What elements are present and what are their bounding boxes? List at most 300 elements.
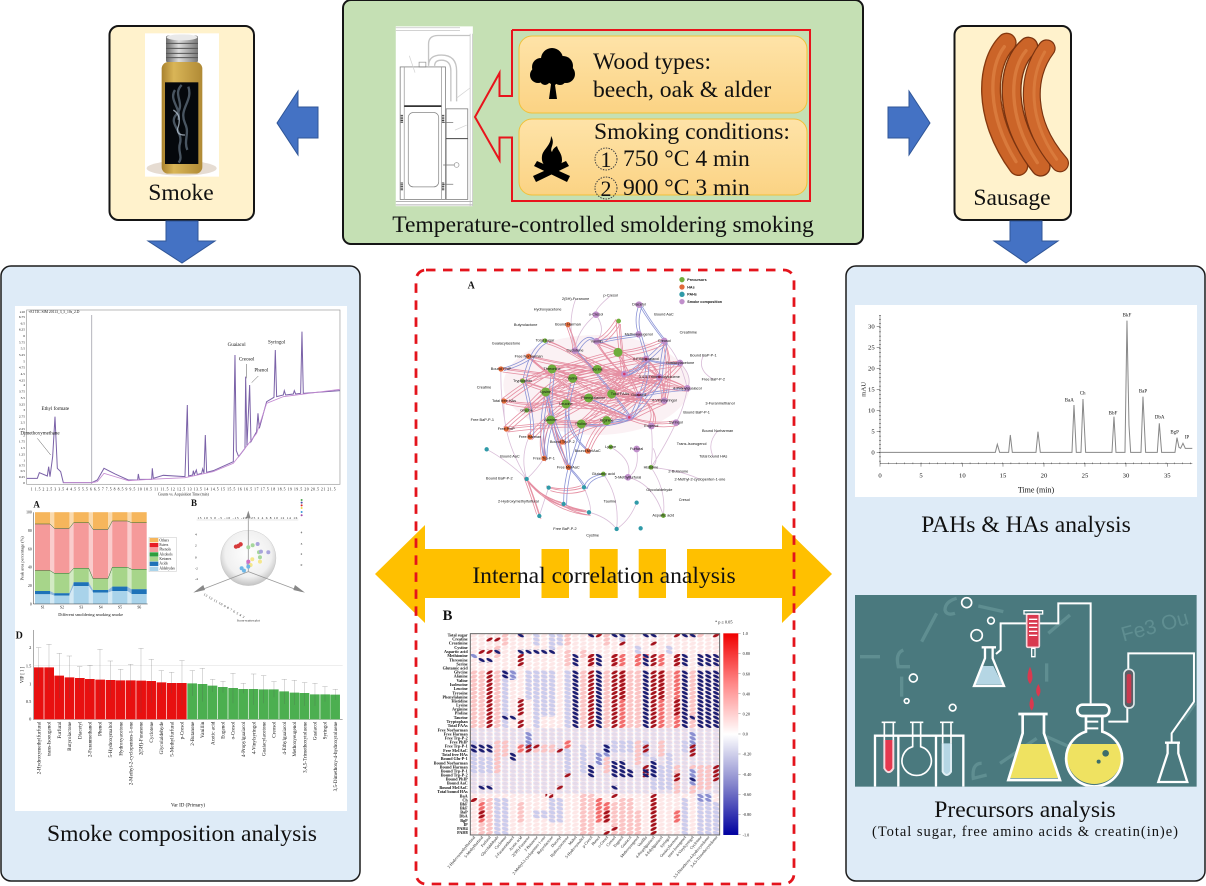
network labels: Cresol [679,498,690,502]
network labels: Free BaP-P-2 [702,377,725,381]
heatmap colour scale: -0.60 [743,792,751,797]
chart: chromatogram: Dimethoxymethane [20,431,60,436]
heatmap row labels: Glutamic acid [443,665,468,670]
chart B: correlation heatmap: B [443,608,453,624]
heatmap column labels: Eugenol [612,834,625,848]
chart A: stacked composition bars: Different smoldering smoking smoke [58,612,123,617]
heatmap row labels: Leucine [454,686,468,691]
chart D: VIP bars: trans-Isoeugenol [47,721,53,756]
chart B: 3D PCA: -2 [195,566,198,570]
network labels: Lysine [540,390,551,394]
network labels: Glycolaldehyde [646,488,672,492]
chart: PAHs chromatogram: 15 [1000,472,1007,479]
arrow: sausage down [994,221,1058,263]
caption: precursors: (Total sugar, free amino acids & creatin(in)e) [872,824,1178,840]
heatmap column labels: Phenol [590,834,602,846]
heatmap row labels: BaA [460,793,468,798]
chart: PAHs chromatogram: mAU [860,382,867,397]
network labels: Bound BaP-P-2 [486,476,513,480]
heatmap column labels: Syringol [659,834,672,848]
heatmap row labels: Valine [456,678,468,683]
heatmap row labels: BgP [460,818,468,823]
chart: chromatogram: 5.5 [21,347,25,351]
heatmap colour scale: -0.40 [743,772,751,777]
network labels: Creatinine [680,331,697,335]
chart: PAHs chromatogram [860,314,1192,495]
chart A: stacked composition bars: S1 [41,606,45,610]
chart D: VIP bars: 4-Vinylsyringol [251,721,257,754]
chart: PAHs chromatogram: 25 [868,345,875,352]
network labels: Furfural [630,447,643,451]
network labels: 3,4,5-Trimethoxytoluene [639,375,680,379]
legend: compound classes [149,537,176,572]
chart B: 3D PCA: 15 10 5 0 -5 -10 -15 -20 -25 2 4 6 8 10 12 14 16 [197,516,298,520]
chart: PAHs chromatogram: 0 [871,450,875,457]
chart: chromatogram: 0.25 [19,475,25,479]
chart D: VIP bars: p-Cresol [180,721,186,739]
network labels: Arginine [600,419,614,423]
heatmap row labels: Serine [456,661,468,666]
chart B: 3D PCA: 4 [195,532,197,536]
icon: sausages [991,43,1060,167]
arrow: smoke down [148,221,215,263]
heatmap column labels: Hydroxyacetone [549,835,570,858]
chart: PAHs chromatogram: 20 [868,366,875,373]
chart D: VIP bars: 0.5 [26,699,31,704]
network labels: Glutamic acid [592,472,615,476]
network labels: 4-Ethylguaiacol [633,357,659,361]
chart A: stacked composition bars: 20 [28,584,32,588]
chart: PAHs chromatogram: 5 [919,472,923,479]
caption: smoke composition: Smoke composition analysis [47,821,317,847]
chart D: VIP bars: 1 [29,681,31,686]
network labels: 2(5H)-Furanone [562,297,589,301]
heatmap row labels: Bound Harman [440,764,468,769]
chart: PAHs chromatogram: DbA [1155,415,1165,420]
network labels: Taurine [604,500,616,504]
chart D: VIP bars: 1.5 [26,663,31,668]
network labels: Histidine [644,465,658,469]
callout frame [475,30,810,201]
illustration: laboratory glassware: Fe3 Ou [1119,606,1191,646]
chart: chromatogram: 1.25 [19,452,25,456]
arrow: process to smoke [277,91,318,155]
heatmap row labels: Free Trp-P-1 [445,744,468,749]
chart A: stacked composition bars: S4 [99,606,103,610]
chart D: VIP bars: D [16,631,23,642]
network labels: Free Harman [519,435,541,439]
chart A: stacked composition bars: S3 [79,606,83,610]
chart A: stacked composition bars: 100 [26,511,32,515]
chart: chromatogram: 6.5 [21,321,25,325]
chart: PAHs chromatogram: Ch [1080,392,1086,397]
heatmap row labels: Tyrosine [452,690,468,695]
chart: chromatogram: 6 [23,334,25,338]
network labels: 4-Vinylsyringol [652,399,677,403]
icon: campfire [533,136,570,182]
network labels: Guaiacylacetone [666,361,694,365]
chart: chromatogram: Phenol [254,368,269,373]
heatmap column labels: Butyrolactone [536,835,554,855]
heatmap colour scale: 0.40 [743,691,750,696]
condition 2: 2 [600,176,612,201]
chart: chromatogram: 4.25 [19,378,25,382]
heatmap row labels: PAH4 [457,826,468,831]
heatmap row labels: Proline [455,711,468,716]
network labels: 2-Hydroxymethylfurfural [498,500,539,504]
arrow: process to sausage [888,91,930,155]
network labels: Free MeIAaC [557,465,580,469]
heatmap row labels: Bound Norharman [434,760,468,765]
chart A: stacked composition bars: 0 [30,602,32,606]
chart B: 3D PCA: 13 12 11 10 9 8 7 6 5 4 3 [203,592,246,619]
chart D: VIP bars: Creosol [272,721,278,738]
chart A: stacked composition bars: 60 [28,547,32,551]
chart B: 3D PCA: Score scatter plot [237,619,260,623]
chart D: VIP bars: 2(5H)-Furanone [138,721,145,755]
network labels: Free PhIP [498,427,515,431]
chart: PAHs chromatogram: 35 [1164,472,1171,479]
label: smoke: Smoke [148,180,214,206]
network labels: 3-Furanmethanol [705,402,735,406]
heatmap row labels: Bound PhIP [446,777,468,782]
network labels: Free Trp-P-1 [533,456,555,460]
chart D: VIP bars: Guaiacylacetone [261,721,267,756]
heatmap row labels: Alanine [454,674,468,679]
heatmap colour scale: 0.80 [743,651,750,656]
network labels: 4-Propylguaiacol [673,386,702,390]
conical flask [1010,744,1058,778]
network labels: Serine [592,367,603,371]
chart: PAHs chromatogram: 20 [1041,472,1048,479]
legend: compound classes: Acids [159,562,168,566]
network edges [487,296,718,529]
network labels: Lysine [605,445,616,449]
chart: PAHs chromatogram: 25 [1082,472,1089,479]
heatmap row labels: Phenylalanine [442,694,468,699]
chart: chromatogram: 1.5 [21,446,25,450]
heatmap row labels: Histidine [451,698,468,703]
chart: chromatogram: 1 1.5 2 2.5 3 3.5 4 4.5 5 5.5 6 6.5 7 7.5 8 8.5 9 9.5 10 10.5 11 11.5 12 12.5 13 13.5 14 14.5 15 15.5 16 16.5 17 17.5 18 18.5 19 19.5 20 20.5 21 21.5 [31,488,336,492]
network labels: Total sugar [536,339,555,343]
heatmap row labels: Methionine [447,653,468,658]
heatmap row labels: Total sugar [448,633,468,638]
network labels: Methoxyeugenol [625,332,653,336]
heatmap colour scale: 0.0 [743,732,748,737]
icon: smoke vial [145,33,219,177]
heatmap row labels: Bound Trp-P-1 [441,768,468,773]
chart: PAHs chromatogram: 0 [878,472,882,479]
tubing [996,603,1194,743]
chart: PAHs chromatogram: 15 [868,387,875,394]
panel: sausage [954,26,1071,220]
heatmap row labels: Creatine [452,637,468,642]
chart D: VIP bars: o-Cresol [231,721,237,739]
heatmap column labels: 2-Butanone [523,835,539,852]
chart: chromatogram: 2 [23,433,25,437]
network labels: Free BaP-P-1 [471,418,494,422]
heatmap row labels: DbA [459,814,468,819]
heatmap column labels: 4-Propylguaiacol [634,834,656,859]
heatmap column labels: 5-Hydroxymaltol [564,834,586,859]
network labels: Creatine [477,386,491,390]
heatmap colour scale: 0.60 [743,671,750,676]
chart D: VIP bars: Phenol [98,721,104,736]
chart: chromatogram: x10 [20,310,25,314]
heatmap column labels: Guaiacol [619,834,633,849]
chart A: correlation network [468,277,735,538]
heatmap row labels: Lysine [456,703,468,708]
chart D: VIP bars: 2-Methyl-2-cyclopenten-1-one [128,721,134,785]
network labels: 2-Butanone [668,469,688,473]
network legend: PAHs [687,293,697,297]
chart: PAHs chromatogram: BbF [1109,411,1117,416]
heatmap row labels: BbF [460,801,468,806]
heatmap row labels: Arginine [452,707,468,712]
network labels: Eugenol [644,424,658,428]
network labels: Bound AaC [500,455,520,459]
icon: tree [530,48,575,99]
network labels: Total bound HAs [699,455,727,459]
heatmap column labels: trans-Isoeugenol [666,834,688,858]
heatmap row labels: Aspartic acid [444,649,468,654]
network labels: Bound AaC [654,313,674,317]
network labels: Vanillin [591,339,603,343]
network labels: Trans-Isoeugenol [677,442,707,446]
chart D: VIP bars: Diacetyl [77,721,83,739]
network labels: Guaiacylacetone [492,342,520,346]
chart: PAHs chromatogram: 10 [868,408,875,415]
heatmap row labels: Free MeIAaC [443,748,468,753]
chart D: VIP bars: Var ID (Primary) [171,804,205,809]
network labels: Bound BaP-P-1 [683,411,710,415]
network labels: Creosol [658,339,671,343]
chart: chromatogram: 4 [23,383,25,387]
heatmap row labels: Total free HAs [442,752,468,757]
network labels: Leucine [559,402,573,406]
chart B: 3D PCA: 2 [301,552,303,556]
heatmap column labels: Diacetyl [550,834,563,848]
heatmap row labels: Creatinine [449,641,468,646]
heatmap column labels: 5-Methylfurfural [463,834,485,859]
heatmap column labels: 2(5H)-Furanone [510,835,531,858]
chart: PAHs chromatogram: 30 [1123,472,1130,479]
heatmap row labels: Free Trp-P-2 [445,736,468,741]
caption: PAHs and HAs: PAHs & HAs analysis [921,512,1131,538]
label: internal correlation: Internal correlation analysis [472,563,736,589]
network labels: Butyrolactone [514,323,537,327]
network legend: HAs [687,285,695,289]
chart B: 3D PCA: 3 [301,542,303,546]
chart B: 3D PCA: B [191,498,197,508]
network labels: Cyclotene [566,349,584,353]
heatmap row labels: IP [464,822,468,827]
chart D: VIP bars: Eugenol [221,721,227,739]
heatmap row labels: Tryptophan [446,719,468,724]
caption: precursors: Precursors analysis [934,797,1116,823]
chart: chromatogram: 2.75 [19,414,25,418]
chart D: VIP bars: 5-Methylfurfural [168,721,175,757]
network labels: Diacetyl [632,303,646,307]
heatmap row labels: Ch [462,797,468,802]
heatmap row labels: Free Harman [444,731,468,736]
label: sausage: Sausage [973,185,1051,211]
panel: smoke [110,26,254,220]
chart: chromatogram: 3 [23,408,25,412]
receiving flask [1158,743,1187,782]
network labels: Free BaP-P-2 [553,527,577,531]
chart D: VIP bars: 2-Furanmethanol [88,721,94,757]
chart: chromatogram: 1 [23,459,25,463]
chart D: VIP bars: Furfural [56,721,63,739]
network labels: Valine [567,376,578,380]
heatmap row labels [434,633,468,835]
legend: compound classes: Phenols [159,548,171,552]
chart B: 3D PCA: 0 [195,555,197,559]
heatmap colour scale: 1.0 [743,631,748,636]
chart B: correlation heatmap [434,608,751,880]
chart: PAHs chromatogram: IP [1185,435,1189,440]
chart D: VIP bars: VIP [ 1 ] [20,666,25,683]
heatmap row labels: Bound Glu-P-1 [441,756,468,761]
heatmap row labels: BkF [460,806,468,811]
chart D: VIP bars [16,630,343,809]
heatmap row labels: Bound MeIAaC [439,785,468,790]
heatmap colour scale [723,631,751,837]
chart A: stacked composition bars [19,500,176,617]
chart: PAHs chromatogram: 30 [868,324,875,331]
network labels [471,294,735,538]
heatmap row labels: Free PhIP [450,740,468,745]
heatmap column labels: Cyclotene [493,835,508,850]
chart: PAHs chromatogram: 10 [959,472,966,479]
network labels: 2-Methyl-2-cyclopenten-1-one [675,477,725,481]
chart: chromatogram: 3.75 [19,390,25,394]
chart A: stacked composition bars: S6 [137,606,141,610]
chart: chromatogram: Ethyl formate [42,407,70,412]
chart: chromatogram: Syringol [268,341,286,346]
heatmap column labels: Cyclotene [689,835,703,850]
heatmap column labels: 2-Methyl-2-cyclopenten-1-one [511,835,547,876]
heatmap column labels: 4-Ethylguaiacol [644,834,664,857]
chart: chromatogram: 4.5 [21,372,25,376]
condition 1: 1 [600,147,612,172]
network labels: Syringol [669,421,683,425]
chart A: stacked composition bars: S5 [118,606,122,610]
chart: chromatogram [19,310,340,497]
heatmap column labels: Maltol [567,834,578,846]
heatmap row labels: Total bound HAs [437,789,468,794]
panel: precursors and PAHs analysis [846,266,1205,881]
chart: PAHs chromatogram: BaA [1065,399,1074,404]
chart: PAHs chromatogram: Time (min) [1018,486,1054,495]
heatmap column labels: Glycolaldehyde [479,835,500,857]
heatmap row labels: Bound AaC [447,781,468,786]
chart: chromatogram: 3.25 [19,402,25,406]
heatmap colour scale: 0.20 [743,711,750,716]
network labels: Guaiacol [631,393,646,397]
network labels: Total FAAs [611,392,629,396]
chart B: correlation heatmap: * p ≤ 0.05 [715,619,733,624]
chart: chromatogram: 0 [23,481,25,485]
chart: chromatogram: 0.5 [21,469,25,473]
condition 2: 900 °C 3 min [623,175,750,201]
network nodes [546,352,618,424]
condenser [1124,669,1134,708]
chart D: VIP bars: 3,4,5-Trimethoxytoluene [302,721,308,773]
chart B: 3D PCA: 4 [301,530,303,534]
card: smoking conditions [519,119,807,201]
chart: PAHs chromatogram: BkF [1123,314,1131,319]
heatmap column labels: Methoxyeugenol [619,834,641,859]
heatmap row labels: Cystine [454,645,468,650]
small flask [975,666,1003,685]
legend: compound classes: Others [159,538,170,542]
chart D: VIP bars: Syringol [323,721,329,739]
heatmap row labels: Free Norharman [438,727,468,732]
chart D: VIP bars: 4-Propylguaiacol [241,721,247,757]
chart: PAHs chromatogram: BaP [1139,390,1147,395]
text: smoking conditions: Smoking conditions: [594,119,790,145]
chart: chromatogram: 4.75 [19,366,25,370]
chart D: VIP bars: Vanillin [200,721,206,738]
text: wood types: Wood types: [593,49,711,75]
chart D: VIP bars: Glycolaldehyde [159,721,165,754]
heatmap row labels: Glycine [454,670,468,675]
heatmap column labels: Creosol [605,834,617,847]
chalk marks [860,598,1195,778]
chart: chromatogram: +EI TIC SIM 20113_3_5_10s_2.D [28,310,80,314]
chart: PAHs chromatogram: BgP [1170,430,1179,435]
card: wood types: beech, oak & alder [593,77,771,103]
network labels: o-Cresol [589,313,603,317]
heatmap column labels: 2-Furanmethanol [494,834,516,859]
legend: compound classes: Esters [159,543,169,547]
network labels: Bound PhIP [491,367,512,371]
network legend: Smoke composition [687,300,722,304]
chart: chromatogram: Guaiacol [228,343,246,348]
panel: smoke composition analysis [1,266,360,881]
heatmap column labels: o-Cresol [596,834,610,848]
chart D: VIP bars: 0 [29,717,31,722]
legend: compound classes: Ketones [159,557,172,561]
heatmap column labels: Acetic acid [508,835,523,852]
chart D: VIP bars: 2-Butanone [190,721,196,746]
condition 1: 750 °C 4 min [623,146,750,172]
chart D: VIP bars: 2 [29,645,31,650]
network legend [679,277,722,304]
chart D: VIP bars: 4-Ethylguaiacol [282,721,288,755]
network labels: Cystine [586,534,599,538]
burette [1027,614,1039,647]
chart: chromatogram: 5.75 [19,340,25,344]
network labels: Alanine [544,418,557,422]
network labels: Bound Harman [555,323,581,327]
network labels: Hydroxyacetone [534,308,561,312]
heatmap colour scale: -1.0 [743,832,749,837]
heatmap column labels: 3,5-Dimethoxy-4-hydroxytoluene [672,835,711,880]
heatmap column labels: Furfural [480,834,492,848]
network labels: Free Norharman [515,354,543,358]
chart D: VIP bars: 3,5-Dimethoxy-4-hydroxytoluene [333,721,339,791]
heatmap row labels: BaP [460,810,468,815]
chart D: VIP bars: 2-Hydroxymethylfurfural [35,721,42,774]
heatmap row labels: Bound Trp-P-2 [441,773,468,778]
panel: smoking process [343,0,863,244]
chart: chromatogram: 0.75 [19,464,25,468]
chart: chromatogram: 6.75 [19,315,25,319]
round flask [1068,744,1121,784]
